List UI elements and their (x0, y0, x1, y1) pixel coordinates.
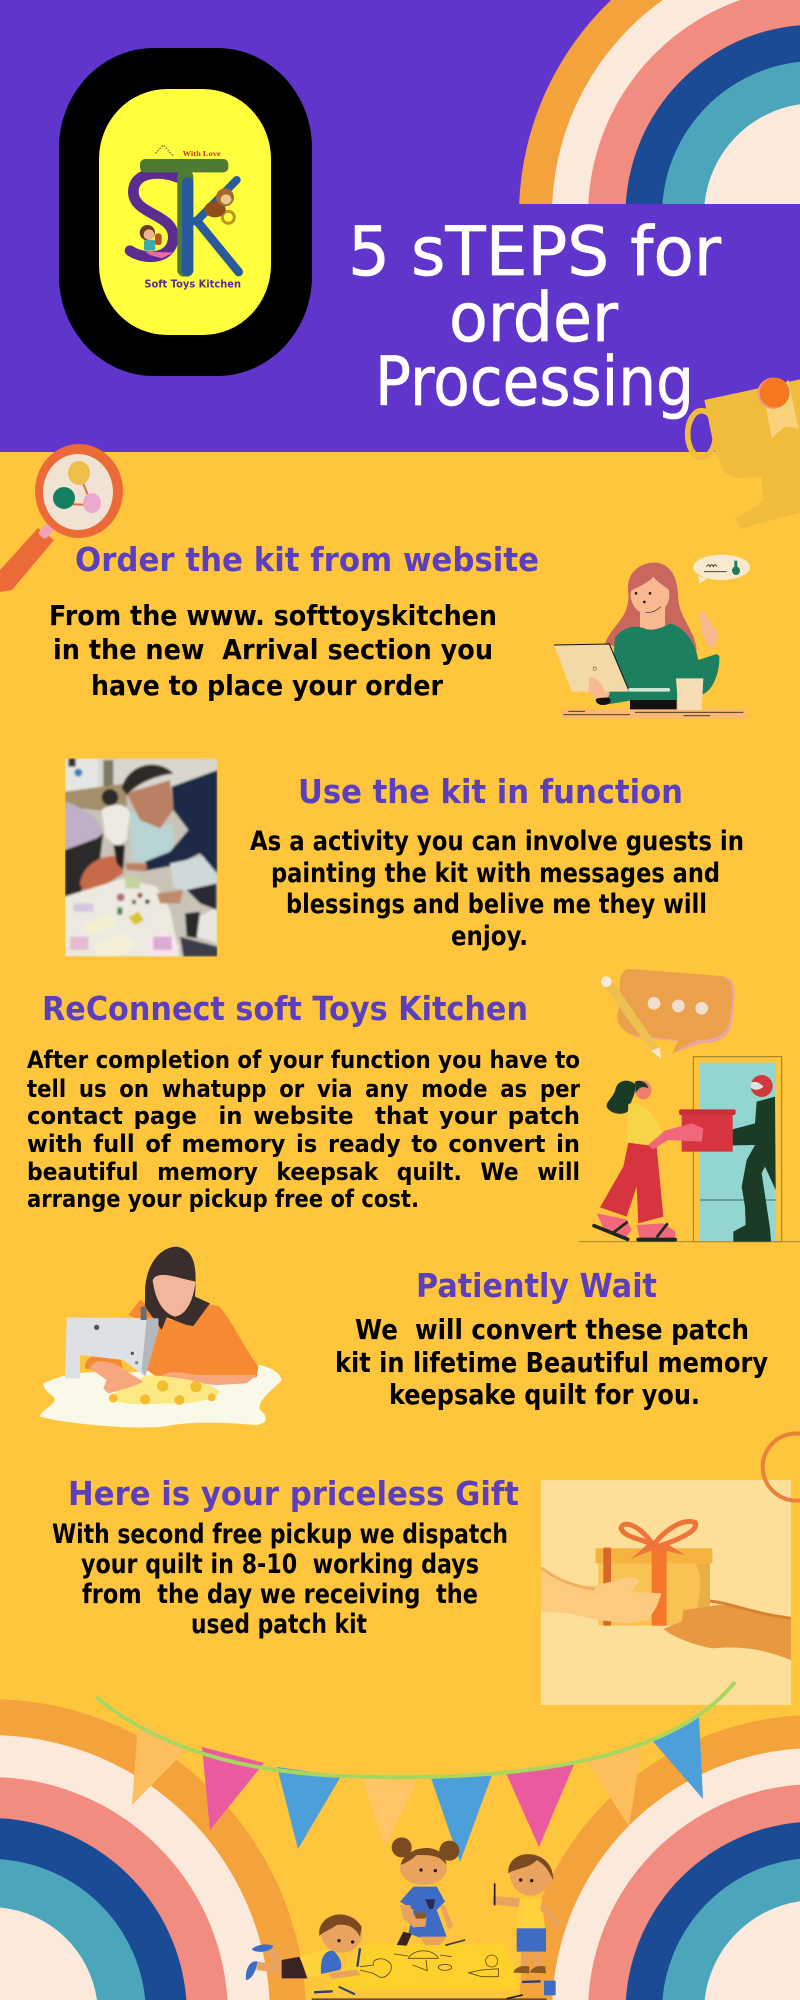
body text (52, 1519, 508, 1640)
icon: magnifier (0, 444, 123, 592)
logo mark (130, 145, 241, 290)
ring decoration near gift (763, 1433, 800, 1501)
body text: from the day we receiving the (82, 1579, 478, 1610)
rainbow: top right (519, 0, 800, 204)
title (348, 213, 721, 422)
body text: We will convert these patch (355, 1313, 749, 1346)
heading: Use the kit in function (298, 772, 683, 811)
photo: guests painting the kit (65, 758, 217, 957)
body text: tell us on whatupp or via any mode as per (27, 1075, 580, 1103)
body text: arrange your pickup free of cost. (27, 1185, 419, 1213)
body text: contact page in website that your patch (27, 1102, 580, 1130)
footer rainbow: right (519, 1715, 800, 2000)
title: Processing (375, 343, 694, 422)
step 4: patiently wait (40, 1247, 768, 1428)
girl (392, 1837, 459, 1946)
body text (335, 1313, 768, 1411)
customer (594, 1081, 703, 1240)
parcel (679, 1109, 736, 1152)
header panel (0, 0, 800, 452)
illustration: woman sewing (40, 1247, 282, 1428)
heading: Here is your priceless Gift (68, 1474, 519, 1513)
heading: ReConnect soft Toys Kitchen (42, 989, 528, 1028)
body text (49, 599, 497, 702)
title: 5 sTEPS for (348, 213, 721, 292)
door (579, 1057, 800, 1242)
boy lying (246, 1914, 362, 1980)
gift illustration panel (541, 1480, 791, 1705)
body text (27, 1046, 580, 1213)
crayons and cup (314, 1940, 556, 1999)
body text: keepsake quilt for you. (389, 1378, 700, 1411)
body text: used patch kit (191, 1609, 367, 1640)
step 5: priceless gift (52, 1474, 791, 1705)
logo mark: Soft Toys Kitchen (144, 278, 241, 290)
body text: enjoy. (451, 921, 528, 952)
heading: Patiently Wait (416, 1266, 657, 1305)
drawings on paper (360, 1951, 498, 1977)
bunting (96, 1682, 735, 1862)
icon: speech bubble (601, 969, 735, 1059)
body text: in the new Arrival section you (53, 633, 493, 666)
body text: with full of memory is ready to convert in (27, 1130, 580, 1158)
illustration: woman with tablet (554, 555, 750, 718)
body text: have to place your order (91, 669, 443, 702)
step 3: reconnect (27, 969, 800, 1242)
logo mark: With Love (183, 149, 222, 158)
body text: blessings and belive me they will (286, 889, 707, 920)
body text (250, 826, 744, 952)
icon: trophy (688, 378, 800, 528)
step 1: order the kit (49, 540, 750, 718)
paper (325, 1943, 520, 1990)
body text: painting the kit with messages and (271, 858, 720, 889)
courier (709, 1075, 776, 1242)
body text: your quilt in 8-10 working days (81, 1549, 479, 1580)
body text: After completion of your function you have to (27, 1046, 580, 1074)
illustration: speech bubble, pencil and doorstep delivery (579, 969, 800, 1242)
boy standing (492, 1854, 562, 1973)
step 2: use the kit (65, 758, 744, 957)
illustration: children drawing (246, 1837, 562, 2000)
footer rainbow: left (0, 1699, 306, 2000)
title: order (449, 279, 618, 358)
body text: beautiful memory keepsak quilt. We will (27, 1158, 580, 1186)
heading: Order the kit from website (75, 540, 539, 579)
body text: From the www. softtoyskitchen (49, 599, 497, 632)
logo badge (59, 48, 312, 376)
body text: With second free pickup we dispatch (52, 1519, 508, 1550)
